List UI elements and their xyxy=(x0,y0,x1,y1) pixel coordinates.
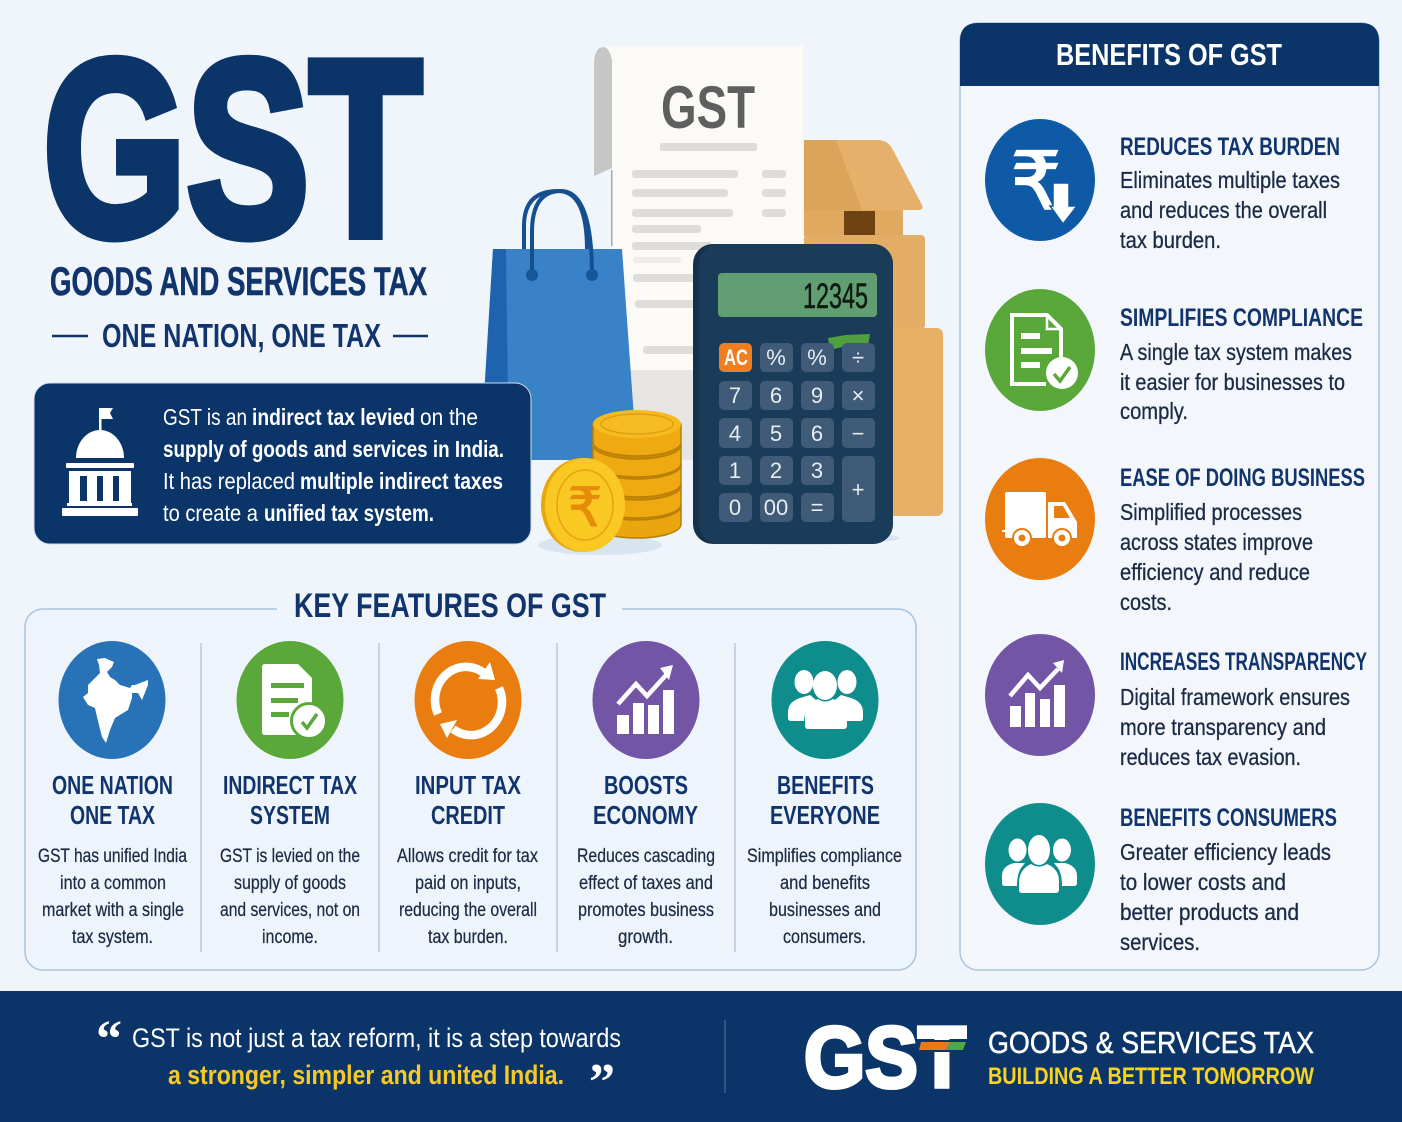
benefit: ease of doing business: across states improve xyxy=(1120,529,1313,555)
feature: benefits everyone: and benefits xyxy=(780,873,870,894)
icon: cycle arrows xyxy=(414,641,522,759)
heading: key features of GST: KEY FEATURES OF GST xyxy=(294,587,606,625)
illustration: calculator: % xyxy=(766,345,786,370)
feature: benefits everyone: BENEFITS xyxy=(777,770,874,800)
text: definition paragraph: indirect tax levied xyxy=(252,404,415,430)
illustration: calculator: 2 xyxy=(770,458,782,483)
logo text xyxy=(988,1025,1314,1090)
illustration: calculator: 00 xyxy=(764,495,788,520)
text: definition paragraph: on the xyxy=(420,404,478,430)
benefit: ease of doing business xyxy=(985,458,1365,615)
illustration: rupee coin xyxy=(541,458,625,552)
benefit: ease of doing business: efficiency and reduce xyxy=(1120,559,1310,585)
benefit: increases transparency: reduces tax evasion. xyxy=(1120,744,1301,770)
heading: benefits of GST: BENEFITS OF GST xyxy=(1056,37,1282,72)
benefit: ease of doing business: costs. xyxy=(1120,589,1172,615)
illustration: shopping bag xyxy=(480,191,637,460)
subtitle: goods and services tax: GOODS AND SERVICES TAX xyxy=(50,260,427,304)
quote: a stronger, simpler and united India. xyxy=(168,1060,564,1090)
benefit: benefits consumers: Greater efficiency leads xyxy=(1120,839,1331,865)
feature: indirect tax system xyxy=(220,641,360,948)
feature: one nation one tax: GST has unified India xyxy=(38,846,187,867)
feature: boosts economy: Reduces cascading xyxy=(577,846,715,867)
feature: one nation one tax: tax system. xyxy=(72,927,153,948)
feature: boosts economy: ECONOMY xyxy=(593,800,698,830)
logo text: GOODS & SERVICES TAX xyxy=(988,1025,1314,1060)
illustration: calculator xyxy=(693,244,893,544)
illustration: calculator: 7 xyxy=(729,383,741,408)
feature: benefits everyone: consumers. xyxy=(783,927,866,948)
illustration: rupee coin: ₹ xyxy=(568,478,602,538)
benefit: increases transparency: more transparency and xyxy=(1120,714,1326,740)
tagline: one nation, one tax: ONE NATION, ONE TAX xyxy=(102,317,381,354)
illustration: calculator: = xyxy=(811,495,823,520)
feature: boosts economy: BOOSTS xyxy=(604,770,688,800)
text: definition paragraph: to create a xyxy=(163,500,258,526)
benefit: simplifies compliance xyxy=(985,289,1363,424)
illustration: calculator: + xyxy=(852,477,864,502)
illustration: calculator: 3 xyxy=(811,458,823,483)
illustration: calculator: × xyxy=(852,383,864,408)
text: definition paragraph: GST is an xyxy=(163,404,247,430)
illustration: calculator: − xyxy=(852,421,864,446)
quote: ” xyxy=(589,1054,615,1111)
feature: one nation one tax: ONE TAX xyxy=(70,800,155,830)
illustration: calculator: 4 xyxy=(729,421,741,446)
benefit: ease of doing business: Simplified processes xyxy=(1120,499,1302,525)
benefit: benefits consumers: to lower costs and xyxy=(1120,869,1286,895)
benefit: simplifies compliance: A single tax system makes xyxy=(1120,339,1352,365)
illustration: coin shadows xyxy=(538,531,900,555)
feature: one nation one tax xyxy=(38,641,187,948)
icon: truck xyxy=(985,458,1095,580)
feature: indirect tax system: and services, not on xyxy=(220,900,360,921)
icon: government building xyxy=(62,408,138,516)
text: definition paragraph: supply of goods and services in India. xyxy=(163,436,504,462)
illustration: coin stack xyxy=(593,410,681,538)
feature: boosts economy: promotes business xyxy=(578,900,714,921)
feature: indirect tax system: INDIRECT TAX xyxy=(223,770,357,800)
feature: input tax credit: tax burden. xyxy=(428,927,508,948)
benefit: increases transparency xyxy=(985,634,1367,770)
illustration: cardboard boxes xyxy=(804,140,943,516)
illustration: calculator: 5 xyxy=(770,421,782,446)
icon: people xyxy=(772,641,878,759)
benefit: reduces tax burden xyxy=(985,119,1340,253)
icon: document with check xyxy=(236,641,344,759)
logo: GST: GST xyxy=(804,1010,966,1106)
feature: input tax credit: INPUT TAX xyxy=(415,770,522,800)
text: definition paragraph xyxy=(163,404,504,526)
benefit: benefits consumers: services. xyxy=(1120,929,1200,955)
feature: indirect tax system: GST is levied on the xyxy=(220,846,360,867)
feature: indirect tax system: supply of goods xyxy=(234,873,346,894)
text: definition paragraph: It has replaced xyxy=(163,468,295,494)
icon: rupee down: ₹ xyxy=(1011,137,1061,226)
quote xyxy=(96,1011,621,1111)
feature: boosts economy xyxy=(577,641,715,948)
logo text: BUILDING A BETTER TOMORROW xyxy=(988,1063,1314,1090)
feature: boosts economy: effect of taxes and xyxy=(579,873,713,894)
title: GST: GST xyxy=(43,9,422,289)
feature: indirect tax system: income. xyxy=(262,927,318,948)
illustration: calculator: AC xyxy=(724,345,748,370)
feature: one nation one tax: ONE NATION xyxy=(52,770,173,800)
illustration: calculator: % xyxy=(807,345,827,370)
panel: benefits of GST xyxy=(960,23,1379,970)
feature: indirect tax system: SYSTEM xyxy=(250,800,330,830)
feature: benefits everyone xyxy=(747,641,902,948)
icon: consumers xyxy=(985,803,1095,925)
illustration: calculator: 6 xyxy=(811,421,823,446)
panel: key features xyxy=(25,587,916,970)
text: definition paragraph: multiple indirect taxes xyxy=(300,468,503,494)
benefit: benefits consumers xyxy=(985,803,1337,955)
benefit: simplifies compliance: comply. xyxy=(1120,398,1188,424)
benefit: increases transparency: Digital framework ensures xyxy=(1120,684,1350,710)
illustration: calculator: 6 xyxy=(770,383,782,408)
illustration: calculator: 1 xyxy=(729,458,741,483)
icon: transparency chart xyxy=(985,634,1095,756)
benefit: simplifies compliance: it easier for businesses to xyxy=(1120,369,1345,395)
quote: GST is not just a tax reform, it is a step towards xyxy=(132,1023,621,1053)
feature: input tax credit: CREDIT xyxy=(431,800,505,830)
illustration: calculator: 9 xyxy=(811,383,823,408)
illustration: calculator: ÷ xyxy=(852,345,864,370)
quote: “ xyxy=(96,1011,122,1068)
footer band xyxy=(0,991,1402,1122)
illustration: GST receipt: GST xyxy=(661,74,755,141)
text: definition paragraph: unified tax system. xyxy=(264,500,434,526)
benefit: reduces tax burden: and reduces the overall xyxy=(1120,197,1327,223)
callout: GST definition xyxy=(34,383,531,544)
feature: input tax credit xyxy=(397,641,538,948)
benefit: benefits consumers: better products and xyxy=(1120,899,1299,925)
feature: input tax credit: Allows credit for tax xyxy=(397,846,538,867)
benefit: reduces tax burden: tax burden. xyxy=(1120,227,1221,253)
feature: one nation one tax: market with a single xyxy=(42,900,184,921)
icon: India map xyxy=(58,641,166,759)
illustration: calculator: 0 xyxy=(729,495,741,520)
feature: input tax credit: reducing the overall xyxy=(399,900,537,921)
feature: benefits everyone: Simplifies compliance xyxy=(747,846,902,867)
icon: compliance document xyxy=(985,289,1095,411)
illustration: GST receipt xyxy=(594,46,803,460)
feature: input tax credit: paid on inputs, xyxy=(415,873,521,894)
icon: growth chart xyxy=(592,641,700,759)
feature: boosts economy: growth. xyxy=(618,927,673,948)
feature: benefits everyone: businesses and xyxy=(769,900,881,921)
illustration: calculator: 12345 xyxy=(803,277,868,316)
icon: rupee down xyxy=(985,119,1095,241)
feature: benefits everyone: EVERYONE xyxy=(770,800,880,830)
feature: one nation one tax: into a common xyxy=(60,873,166,894)
illustration: receipt, bag, coins, boxes and calculator xyxy=(480,46,943,555)
heading: benefits of GST xyxy=(960,23,1379,86)
benefit: reduces tax burden: Eliminates multiple taxes xyxy=(1120,167,1340,193)
